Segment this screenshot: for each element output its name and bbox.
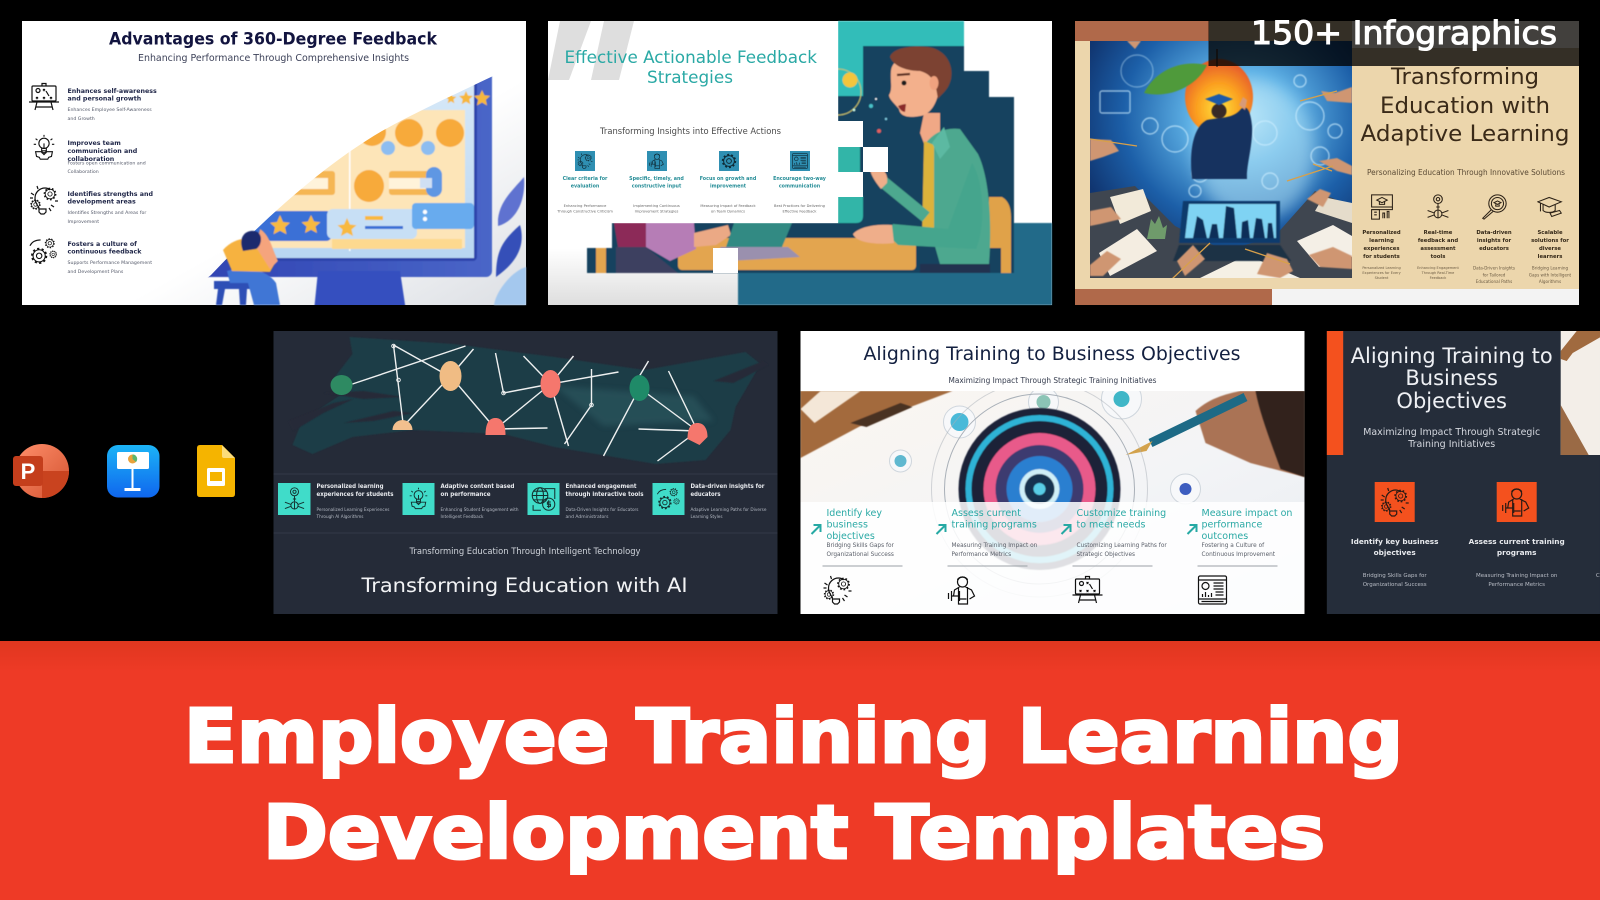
feature titles xyxy=(316,484,765,498)
objective labels: Identify key business xyxy=(1351,537,1438,546)
icon: bulb and gear xyxy=(34,135,54,159)
icon tile: network xyxy=(278,483,310,515)
feature descriptions: Data-Driven Insights for Educators xyxy=(566,507,639,513)
panel: Advantages of 360-Degree Feedback xyxy=(22,21,526,311)
column descriptions: Enhancing Performance xyxy=(564,204,607,208)
icon tile 3 xyxy=(719,151,739,171)
subtitle: Transforming Insights into Effective Actions xyxy=(599,127,781,137)
feature descriptions: and Administrators xyxy=(566,514,609,520)
title: Aligning Training to xyxy=(1351,344,1553,368)
strategy columns xyxy=(556,151,827,214)
illustration: monitor with rating cards xyxy=(208,76,493,305)
feature titles: Personalized learning xyxy=(316,484,384,490)
feature titles: through interactive tools xyxy=(566,492,644,498)
column descriptions: Continuous Improvement xyxy=(1202,552,1276,558)
column labels xyxy=(563,176,827,190)
tablet with silhouettes xyxy=(1173,201,1291,261)
item: continuous feedback xyxy=(30,239,152,275)
icon: PowerPoint xyxy=(13,444,69,498)
column descriptions: Measuring Impact of Feedback xyxy=(700,204,756,208)
column titles: outcomes xyxy=(1202,531,1248,542)
column descriptions: Effective Feedback xyxy=(783,210,817,214)
feature titles: experiences for students xyxy=(316,492,394,498)
panel: Aligning Training to Business Objectives (dark) xyxy=(1327,331,1600,614)
subtitle xyxy=(1363,427,1540,450)
column descriptions: Fostering a Culture of xyxy=(1202,543,1265,549)
white text area xyxy=(548,21,838,223)
illustration: leaves xyxy=(494,177,526,305)
icon tile: gears xyxy=(652,483,684,515)
item: continuous feedback: Supports Performance Management xyxy=(68,260,152,266)
column labels: Scalable xyxy=(1537,230,1563,236)
item: self-awareness: and personal growth xyxy=(68,96,141,102)
photo: target on paper with pen xyxy=(800,391,1304,584)
title xyxy=(1351,344,1553,413)
item: strengths: Improvement xyxy=(68,219,99,225)
column labels: Specific, timely, and xyxy=(629,176,684,182)
main title: Employee Training Learning xyxy=(184,694,1403,780)
item: team communication: collaboration xyxy=(68,156,114,163)
illustration: man at desk xyxy=(587,21,1052,305)
column descriptions: Improvement Strategies xyxy=(635,210,678,214)
main title xyxy=(184,694,1403,876)
column titles: Customize training xyxy=(1076,508,1166,519)
column labels: feedback and xyxy=(1418,238,1458,244)
subtitle: Maximizing Impact Through Strategic xyxy=(1363,427,1540,438)
title xyxy=(1360,65,1570,147)
icon tile: globe xyxy=(528,483,560,515)
column descriptions: Personalized Learning xyxy=(1362,266,1401,270)
column titles: Measure impact on xyxy=(1202,508,1292,519)
man xyxy=(920,113,940,149)
feature titles: Data-driven insights for xyxy=(690,484,765,490)
target rings xyxy=(931,391,1148,584)
app logos row xyxy=(13,444,235,498)
heading: 150+ Infographics: 150+ Infographics xyxy=(1251,14,1557,52)
decorative quote marks xyxy=(548,21,634,80)
column descriptions: Algorithms xyxy=(1539,279,1561,284)
column labels: evaluation xyxy=(571,184,600,190)
title: Effective Actionable Feedback xyxy=(564,48,817,68)
panel: Aligning Training to Business Objectives (light) xyxy=(800,331,1304,614)
column titles: training programs xyxy=(952,520,1037,530)
column descriptions: Performance Metrics xyxy=(952,552,1011,558)
column descriptions: Gaps with Intelligent xyxy=(1529,272,1572,278)
icon: Keynote xyxy=(107,445,160,498)
small nodes xyxy=(889,391,1201,502)
title: Transforming xyxy=(1390,65,1539,90)
feature titles: on performance xyxy=(440,492,491,498)
column titles: objectives xyxy=(826,531,875,542)
icon: dashboard xyxy=(1198,576,1226,604)
item: strengths: development areas xyxy=(68,198,136,206)
white pixel squares xyxy=(713,121,888,273)
glowing tech icons xyxy=(1100,55,1342,197)
column descriptions: Feedback xyxy=(1430,276,1447,280)
objective descriptions: Measuring Training Impact on xyxy=(1476,573,1558,579)
icon tile: bulb xyxy=(402,483,434,515)
item: strengths xyxy=(30,186,153,225)
item: self-awareness: Enhances Employee Self-Awareness xyxy=(68,107,152,113)
objective descriptions: Performance Metrics xyxy=(1488,582,1545,588)
column labels: Encourage two-way xyxy=(773,176,827,182)
column descriptions: Bridging Skills Gaps for xyxy=(826,543,895,549)
item: continuous feedback: Fosters a culture of xyxy=(68,241,137,248)
chalkboard network image xyxy=(288,337,768,464)
icon: gears xyxy=(30,239,57,263)
item: continuous feedback: and Development Plans xyxy=(68,269,124,275)
brown accents xyxy=(1075,21,1579,305)
feature descriptions: Intelligent Feedback xyxy=(440,514,484,520)
feature titles: educators xyxy=(690,492,721,498)
objective labels: programs xyxy=(1497,548,1536,557)
icon: board xyxy=(1072,576,1102,603)
icon: gear idea xyxy=(824,576,852,604)
column labels: improvement xyxy=(710,184,747,190)
column descriptions xyxy=(1362,266,1572,284)
translucent lower overlay xyxy=(800,502,1304,614)
column labels: Real-time xyxy=(1424,230,1453,236)
title: Transforming Education with AI xyxy=(360,574,687,597)
column descriptions: Data-Driven Insights xyxy=(1473,266,1515,270)
column descriptions: Experiences for Every xyxy=(1362,271,1401,275)
column titles xyxy=(826,508,1292,542)
icon: lab screen xyxy=(1372,195,1392,219)
column descriptions: Customizing Learning Paths for xyxy=(1076,543,1167,549)
column labels: experiences xyxy=(1363,246,1400,252)
column labels: communication xyxy=(779,184,821,190)
title: Adaptive Learning xyxy=(1360,122,1570,147)
feature columns xyxy=(1362,195,1572,284)
icon: Google Slides xyxy=(197,445,235,497)
column descriptions: on Team Dynamics xyxy=(711,210,745,214)
subtitle: Training Initiatives xyxy=(1407,439,1495,450)
column labels: Personalized xyxy=(1362,230,1401,236)
column descriptions: Bridging Learning xyxy=(1532,266,1569,270)
main title: Development Templates xyxy=(263,790,1325,876)
item: strengths: Identifies Strengths and Areas for xyxy=(68,210,146,216)
panel: Transforming Education with Adaptive Learning xyxy=(1075,21,1579,305)
icon: magnifier xyxy=(1483,195,1506,219)
icon tile 4 xyxy=(790,151,810,171)
column descriptions xyxy=(826,543,1276,558)
objective labels: Assess current training xyxy=(1469,537,1565,546)
icon: strategy board xyxy=(29,84,59,110)
icon: PowerPoint: P xyxy=(21,459,35,484)
column labels: for students xyxy=(1363,254,1400,260)
chair xyxy=(989,197,1011,273)
plant xyxy=(1147,216,1167,239)
objective descriptions xyxy=(1363,573,1600,588)
title: Objectives xyxy=(1396,389,1507,413)
column descriptions: Implementing Continuous xyxy=(633,204,680,208)
objective columns xyxy=(812,508,1292,604)
column labels: Focus on growth and xyxy=(700,176,757,182)
title: Aligning Training to Business Objectives xyxy=(864,343,1240,365)
brush streaks xyxy=(288,361,768,431)
icon: gear idea xyxy=(30,186,58,214)
objective descriptions: Organizational Success xyxy=(1363,582,1427,588)
table xyxy=(678,238,916,270)
red title band xyxy=(0,641,1600,900)
feature descriptions: Through AI Algorithms xyxy=(316,514,364,520)
column descriptions: Through Real-Time xyxy=(1421,271,1454,275)
leaf xyxy=(1144,63,1207,94)
item: strengths: Identifies strengths and xyxy=(68,191,153,198)
column descriptions: Student xyxy=(1375,276,1389,280)
hands xyxy=(1090,41,1352,278)
subtitle: Maximizing Impact Through Strategic Training Initiatives xyxy=(948,376,1156,385)
item: team communication: Fosters open communication and xyxy=(68,160,146,166)
column labels: diverse xyxy=(1539,246,1561,252)
icon: coach xyxy=(948,577,974,604)
column labels: insights for xyxy=(1477,238,1511,244)
pencils xyxy=(1090,91,1337,279)
subtitle: Enhancing Performance Through Comprehensive Insights xyxy=(138,53,409,64)
item: self-awareness xyxy=(29,84,157,122)
column titles: Identify key xyxy=(826,508,882,519)
photo: desk corner xyxy=(1561,331,1600,455)
icon tile: gear idea xyxy=(1375,482,1415,522)
hand and pen xyxy=(1196,391,1304,477)
icon: network xyxy=(1428,195,1448,218)
item: team communication: Collaboration xyxy=(68,169,99,175)
orange accent bar xyxy=(1327,331,1343,455)
panel: Transforming Education with AI xyxy=(274,331,778,614)
column titles: performance xyxy=(1202,520,1262,530)
title: Strategies xyxy=(647,68,733,88)
column labels: Data-driven xyxy=(1476,230,1512,236)
column labels: learners xyxy=(1538,254,1562,260)
item: self-awareness: and Growth xyxy=(68,116,95,122)
column labels: constructive input xyxy=(632,184,682,190)
column labels: Clear criteria for xyxy=(563,176,608,182)
objective labels xyxy=(1352,538,1564,556)
column descriptions: Organizational Success xyxy=(826,552,894,558)
column descriptions: Enhancing Engagement xyxy=(1417,266,1460,270)
illustration: seated person on stool xyxy=(214,229,280,305)
column titles: business xyxy=(826,520,868,530)
title xyxy=(564,48,817,88)
column labels: solutions for xyxy=(1531,238,1569,244)
column labels: tools xyxy=(1431,254,1445,260)
divider lines xyxy=(274,474,778,533)
column descriptions: Best Practices for Delivering xyxy=(774,204,825,208)
graduate xyxy=(1191,94,1252,179)
subtitle: Transforming Education Through Intelligent Technology xyxy=(408,546,641,556)
feature descriptions xyxy=(316,507,767,520)
column descriptions: for Tailored xyxy=(1483,272,1506,278)
column descriptions xyxy=(556,204,825,214)
column descriptions: Measuring Training Impact on xyxy=(952,543,1038,549)
column descriptions: Educational Paths xyxy=(1476,279,1512,284)
feature titles: Adaptive content based xyxy=(440,484,514,490)
column labels xyxy=(1362,230,1569,260)
item: continuous feedback: continuous feedback xyxy=(68,248,142,256)
title: Business xyxy=(1405,366,1498,390)
column labels: educators xyxy=(1479,246,1509,252)
icon: graduation cap xyxy=(1538,197,1561,217)
desks and papers xyxy=(1090,186,1352,278)
apple xyxy=(1185,59,1253,135)
arrows xyxy=(812,525,1196,534)
column descriptions: Through Constructive Criticism xyxy=(556,210,613,214)
item: team communication: Improves team xyxy=(68,140,121,147)
icon tile 2 xyxy=(647,151,667,171)
column titles: to meet needs xyxy=(1076,520,1145,530)
column labels: learning xyxy=(1369,238,1394,244)
feature descriptions: Learning Styles xyxy=(690,514,723,520)
photo: graduate and apple collage xyxy=(1090,41,1352,279)
woman and laptop xyxy=(596,248,606,273)
objective descriptions: Bridging Skills Gaps for xyxy=(1363,573,1427,579)
objective labels: objectives xyxy=(1374,548,1416,557)
item: team communication xyxy=(34,135,146,175)
feature descriptions: Enhancing Student Engagement with xyxy=(440,507,519,513)
item: self-awareness: Enhances self-awareness xyxy=(68,88,157,95)
panel: Effective Actionable Feedback Strategies xyxy=(548,21,1052,305)
title: Advantages of 360-Degree Feedback xyxy=(109,30,438,48)
column titles: Assess current xyxy=(952,508,1021,519)
feature titles: Enhanced engagement xyxy=(566,484,637,490)
icon tile: coach xyxy=(1497,482,1537,522)
item: team communication: communication and xyxy=(68,148,137,155)
feature row xyxy=(278,483,767,520)
feature descriptions: Personalized Learning Experiences xyxy=(316,507,390,513)
dark header overlay xyxy=(1208,21,1579,66)
column labels: assessment xyxy=(1420,246,1456,252)
column descriptions: Strategic Objectives xyxy=(1076,552,1135,558)
feature descriptions: Adaptive Learning Paths for Diverse xyxy=(690,507,767,513)
subtitle: Personalizing Education Through Innovative Solutions xyxy=(1367,168,1565,177)
icon tile 1 xyxy=(575,151,595,171)
title: Education with xyxy=(1380,94,1550,119)
